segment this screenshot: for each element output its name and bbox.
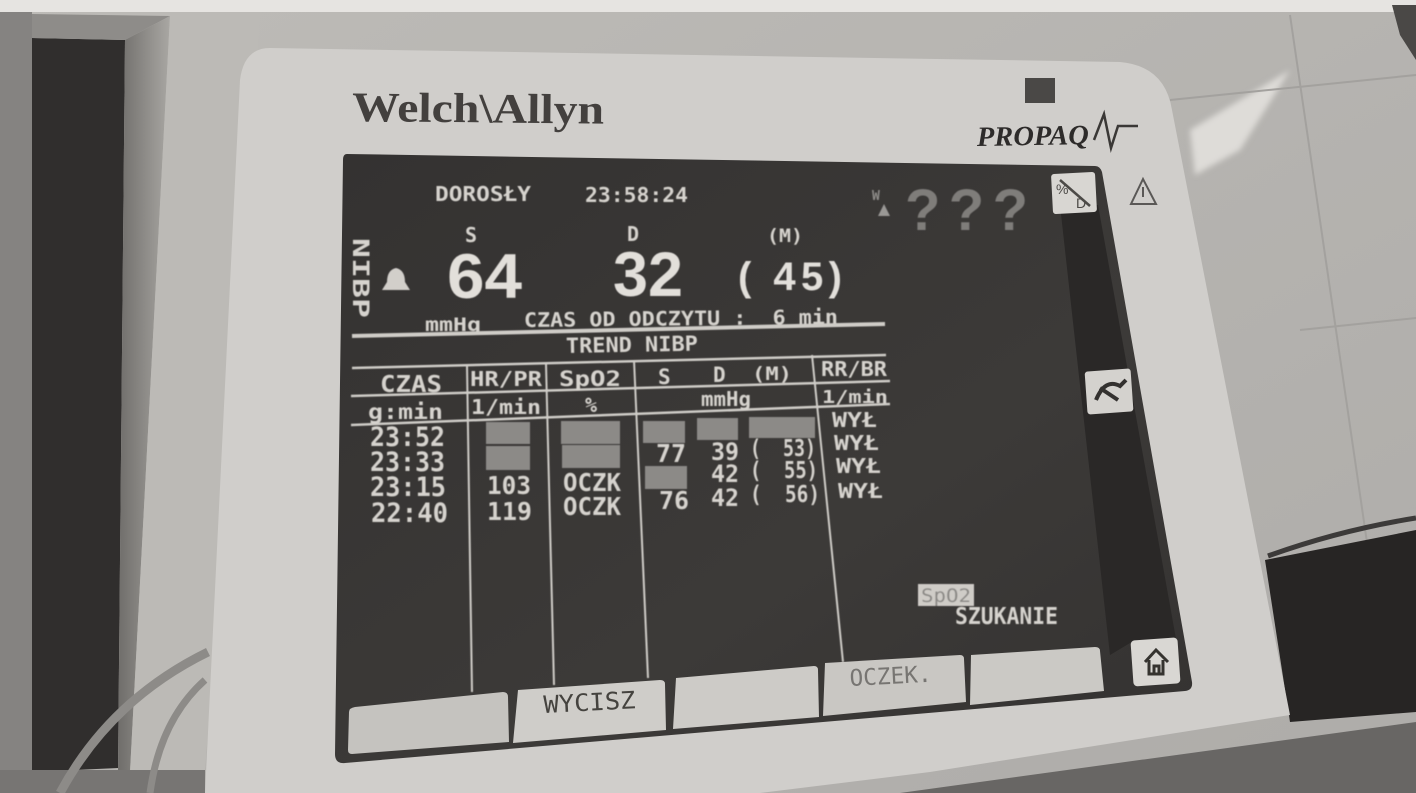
- SpO2 values: OCZK: [563, 468, 621, 497]
- model logo PROPAQ: PROPAQ: [976, 120, 1089, 153]
- indicator square: [1025, 78, 1055, 103]
- respiration values: WYŁ: [838, 479, 883, 503]
- SpO2 values: [563, 468, 621, 521]
- blood pressure trend values: ( 56): [750, 482, 820, 508]
- blood pressure trend values: 42: [711, 484, 739, 512]
- table header row: [380, 357, 888, 398]
- respiration values: [832, 408, 883, 503]
- side button with icon: [1085, 368, 1133, 415]
- respiration values: WYŁ: [834, 431, 879, 455]
- table units row: [368, 387, 888, 424]
- monitor shelf: [900, 722, 1416, 793]
- soft key 1: [348, 692, 509, 754]
- blood pressure trend values: 76: [659, 486, 689, 515]
- blood pressure values: ( 45): [738, 255, 842, 299]
- time column: 23:52: [370, 422, 445, 453]
- table units row: 1/min: [822, 387, 888, 408]
- column letters: (M): [767, 225, 803, 247]
- heart rate values: 103: [487, 471, 531, 500]
- table header row: HR/PR: [470, 367, 543, 391]
- dark equipment box, lower right: [1265, 530, 1416, 722]
- time column: 23:33: [370, 447, 445, 478]
- heart rate values: [487, 471, 532, 526]
- SpO2 search status: SZUKANIE: [955, 604, 1058, 630]
- soft key 5: [970, 647, 1104, 705]
- table grid: [351, 324, 890, 692]
- table header row: S: [658, 365, 671, 389]
- table header row: RR/BR: [821, 357, 888, 381]
- table header row: CZAS: [380, 372, 442, 398]
- top right mute button: %: [1056, 181, 1068, 197]
- SpO2 search status: [918, 584, 1058, 630]
- dark side bar of screen: [1060, 205, 1178, 655]
- heart rate values: 119: [487, 497, 532, 526]
- screen content: [347, 178, 1058, 692]
- greyed out table cells: [486, 417, 815, 489]
- blood pressure values: 64: [447, 242, 522, 312]
- blood pressure values: 32: [613, 240, 683, 310]
- respiration values: WYŁ: [832, 408, 877, 432]
- column letters: S: [465, 223, 477, 247]
- blood pressure trend values: ( 53): [750, 436, 816, 462]
- table header row: D: [713, 363, 726, 387]
- soft key OCZEK: [823, 655, 966, 716]
- table units row: g:min: [368, 400, 443, 424]
- column letters: [465, 222, 803, 247]
- patient mode and clock: 23:58:24: [585, 183, 688, 207]
- soft key WYCISZ: WYCISZ: [543, 686, 636, 719]
- blood pressure values: [447, 240, 842, 312]
- time column: [370, 422, 448, 529]
- top right mute button: [1051, 172, 1097, 214]
- blood pressure trend values: 42: [711, 460, 739, 488]
- home button: [1130, 637, 1181, 687]
- trend heading: TREND NIBP: [566, 332, 698, 358]
- blood pressure trend values: ( 55): [750, 458, 818, 484]
- units and time since reading: [425, 305, 838, 336]
- patient mode and clock: DOROSŁY: [435, 182, 531, 206]
- cables at lower left: [60, 652, 208, 793]
- table units row: mmHg: [701, 387, 751, 411]
- table units row: %: [585, 393, 597, 417]
- SpO2 values: OCZK: [563, 492, 621, 521]
- respiration values: WYŁ: [836, 454, 881, 478]
- NIBP vertical label: NIBP: [347, 238, 372, 318]
- units and time since reading: CZAS OD ODCZYTU : 6 min: [524, 305, 838, 332]
- soft key WYCISZ: [513, 680, 666, 743]
- alert triangle icon: [1131, 179, 1156, 204]
- column letters: D: [627, 222, 639, 246]
- time column: 22:40: [371, 498, 448, 529]
- table header row: (M): [752, 363, 792, 385]
- soft key row: [348, 647, 1104, 754]
- blood pressure trend values: 77: [656, 439, 686, 468]
- table units row: 1/min: [471, 395, 541, 419]
- alarm bell icon: [382, 268, 410, 290]
- SpO2 search status: SpO2: [921, 585, 971, 607]
- top right mute button: D: [1076, 195, 1086, 211]
- soft key OCZEK: OCZEK.: [849, 662, 932, 692]
- blood pressure trend values: 39: [711, 438, 739, 466]
- blood pressure trend values: [656, 436, 820, 515]
- screen: [335, 154, 1192, 763]
- alarm status question marks: ???: [905, 178, 1028, 243]
- brand logo Welch Allyn: Welch\Allyn: [352, 85, 604, 134]
- table header row: SpO2: [559, 367, 621, 391]
- soft key 3: [673, 666, 819, 729]
- model logo PROPAQ: [976, 114, 1138, 153]
- cable at right: [1268, 518, 1416, 556]
- monitor bezel: [205, 48, 1290, 793]
- units and time since reading: mmHg: [425, 314, 481, 336]
- alarm status question marks: W: [872, 189, 880, 204]
- patient mode and clock: [435, 182, 688, 207]
- time column: 23:15: [370, 472, 446, 503]
